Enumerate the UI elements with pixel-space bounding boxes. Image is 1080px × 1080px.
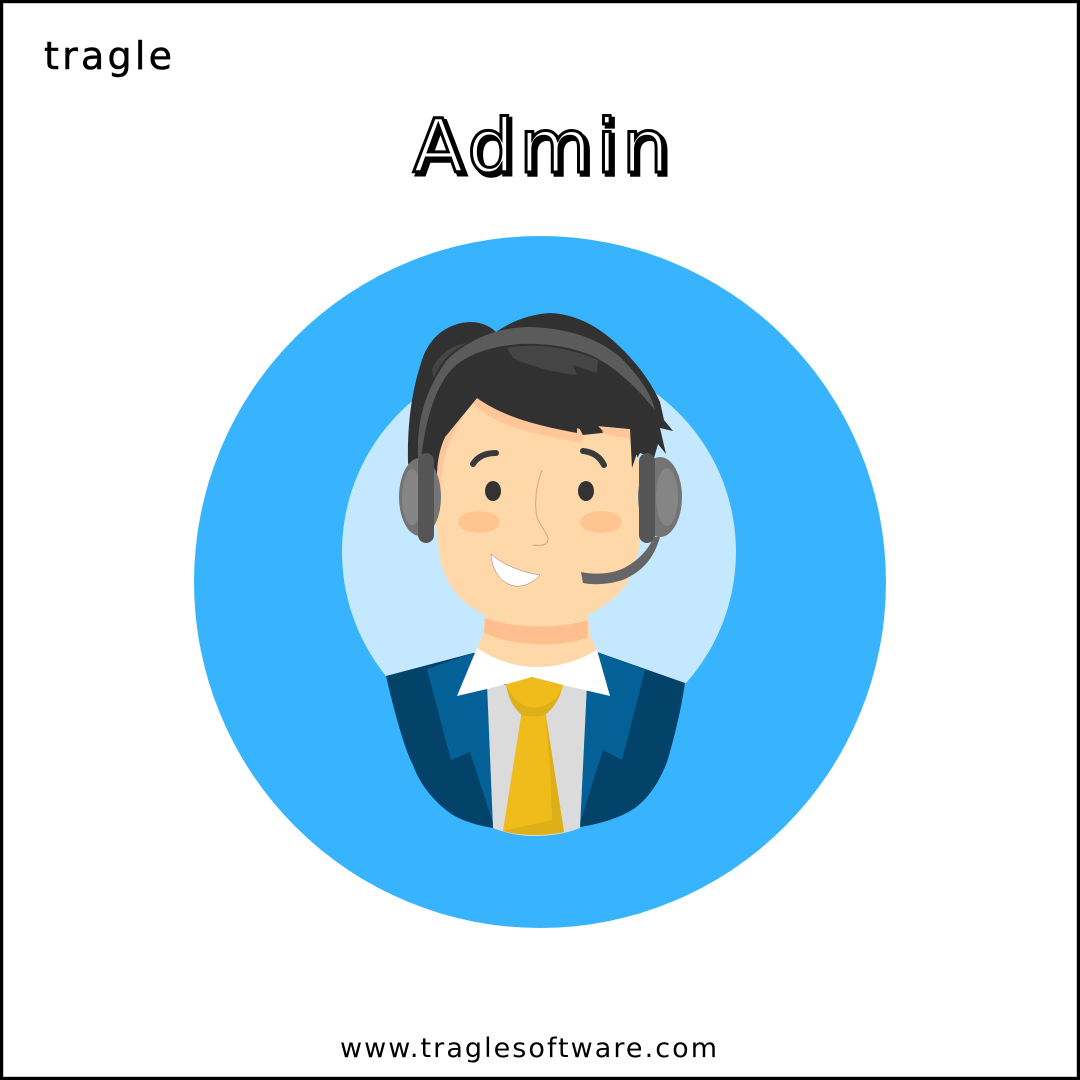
brand logo: tragle — [44, 34, 172, 78]
eyes — [485, 481, 594, 501]
hair fringe shadow on face — [436, 398, 631, 500]
left lapel — [427, 653, 493, 823]
neck — [477, 615, 597, 675]
hair back — [408, 313, 673, 500]
right lapel — [580, 652, 645, 823]
shirt — [487, 685, 587, 836]
illustration: admin with headset — [194, 236, 886, 928]
left ear cup — [399, 453, 441, 543]
website url: www.traglesoftware.com — [340, 1033, 717, 1064]
shirt collar — [457, 648, 610, 696]
title: Admin — [413, 104, 669, 190]
tie — [503, 677, 564, 835]
title: Admin — [416, 107, 672, 193]
headset band — [418, 327, 655, 470]
light blue inner circle — [342, 355, 736, 720]
hair highlight — [432, 343, 598, 378]
eyebrows — [473, 451, 604, 465]
blue background circle — [194, 236, 886, 928]
right ear cup — [638, 453, 682, 543]
nose — [533, 470, 548, 545]
face — [433, 398, 640, 627]
smile — [491, 554, 540, 586]
cheeks — [458, 511, 622, 533]
neck shadow — [484, 618, 588, 644]
jacket — [386, 652, 685, 828]
hair fringe — [420, 335, 655, 500]
microphone arm — [581, 537, 660, 584]
